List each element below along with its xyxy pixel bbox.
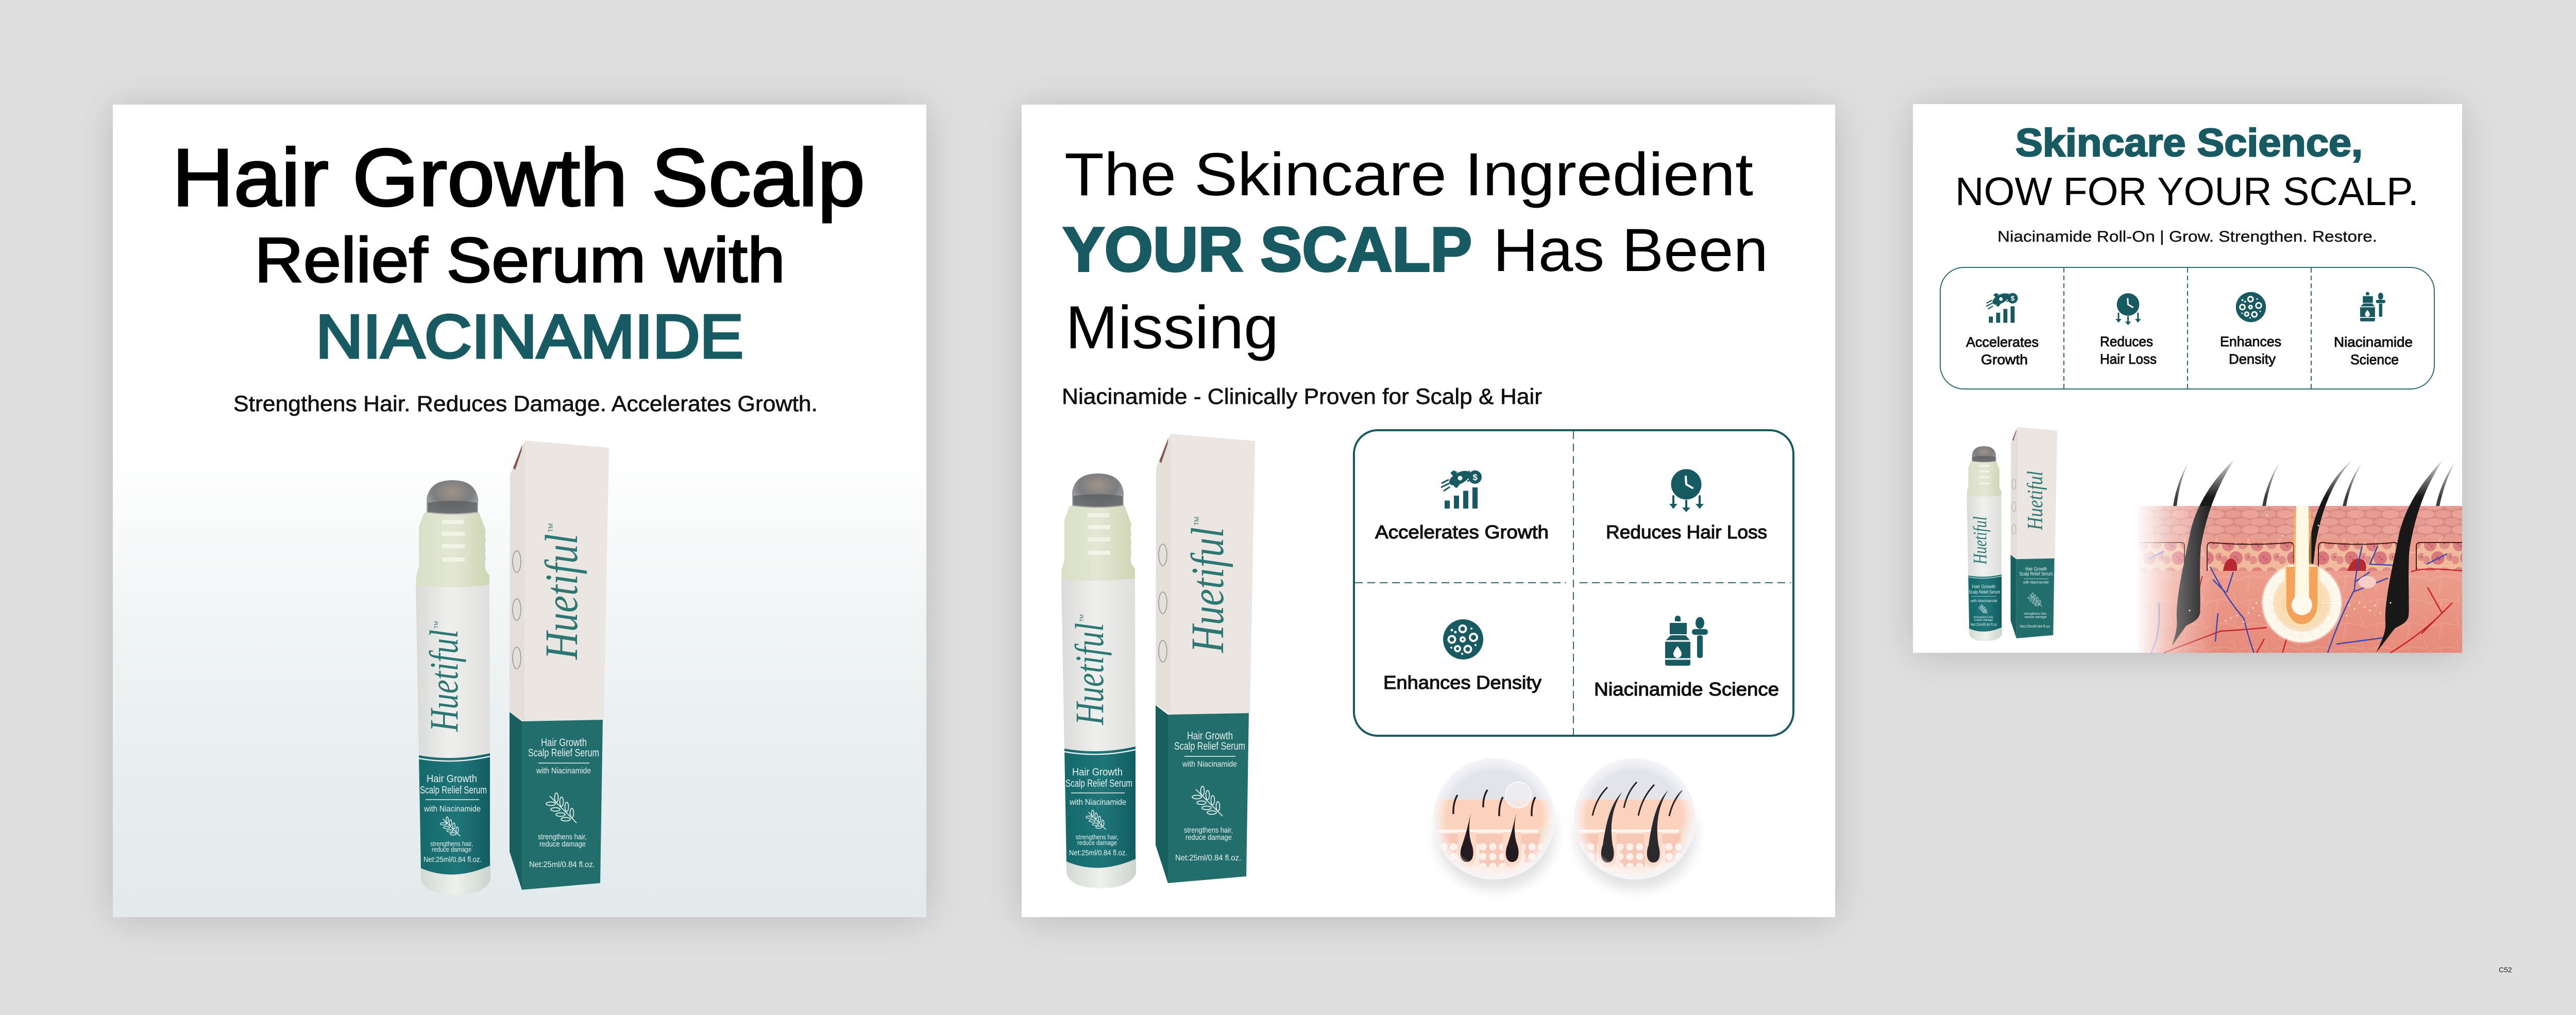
icon: rocket and rising bars <box>1441 468 1482 509</box>
left and top fades <box>2138 453 2462 653</box>
label <box>2100 334 2157 367</box>
product: carton box: TM <box>547 523 554 532</box>
product: carton box: reduce damage <box>539 840 586 849</box>
product: roll-on bottle: with Niacinamide <box>423 805 481 814</box>
product: roll-on bottle: Hair Growth <box>427 773 477 785</box>
product: roll-on bottle: Net:25ml/0.84 fl.oz. <box>1069 849 1127 857</box>
icon: follicle density circle <box>2236 292 2266 322</box>
subtitle: Niacinamide Roll-On | Grow. Strengthen. Restore. <box>1997 228 2377 245</box>
label: Hair Loss <box>2100 351 2157 367</box>
panel: hair growth scalp relief serum <box>113 105 926 917</box>
product: roll-on bottle: with Niacinamide <box>1069 798 1126 807</box>
label: Reduces Hair Loss <box>1606 521 1767 543</box>
product: roll-on bottle: reduce damage <box>1077 839 1117 847</box>
product: roll-on bottle: Scalp Relief Serum <box>420 785 487 796</box>
headline: YOUR SCALP <box>1063 214 1472 284</box>
label: Niacinamide Science <box>1594 679 1779 700</box>
product: roll-on bottle: Hair Growth <box>1972 583 1995 589</box>
product: roll-on bottle: Scalp Relief Serum <box>1969 589 2000 595</box>
product: carton box: Huetiful <box>1182 527 1233 653</box>
headline: NOW FOR YOUR SCALP. <box>1955 170 2419 214</box>
headline: The Skincare Ingredient <box>1064 141 1753 209</box>
headline <box>1955 121 2419 214</box>
product: carton box: Hair Growth <box>1187 730 1233 742</box>
subtitle: Niacinamide - Clinically Proven for Scalp & Hair <box>1062 384 1542 409</box>
label: Accelerates <box>1966 334 2039 350</box>
product: roll-on bottle <box>1967 446 2002 641</box>
title <box>172 132 865 371</box>
product: carton box: Net:25ml/0.84 fl.oz. <box>529 860 595 869</box>
product: carton box: Scalp Relief Serum <box>2019 571 2053 577</box>
label: Enhances <box>2220 334 2281 349</box>
product: roll-on bottle: Huetiful <box>421 630 466 732</box>
product: roll-on bottle <box>416 480 490 895</box>
headline: Missing <box>1065 294 1279 362</box>
hairs <box>2172 460 2455 653</box>
headline: Has Been <box>1493 216 1768 284</box>
product: roll-on bottle: strengthens hair, <box>1974 616 1994 619</box>
label <box>2334 334 2413 367</box>
label <box>1966 334 2039 367</box>
label <box>2220 334 2281 367</box>
title: Hair Growth Scalp <box>172 132 865 223</box>
label: Growth <box>1981 352 2028 367</box>
panel background <box>1913 104 2462 653</box>
title: NIACINAMIDE <box>316 302 743 371</box>
product: carton box: Hair Growth <box>2025 567 2047 572</box>
product: carton box: reduce damage <box>2025 615 2046 619</box>
icon: clock with falling arrows <box>1669 469 1704 512</box>
product: roll-on bottle: Net:25ml/0.84 fl.oz. <box>423 855 482 864</box>
product: carton box: strengthens hair, <box>2024 612 2047 616</box>
benefits card <box>1354 430 1793 736</box>
product: roll-on bottle: Scalp Relief Serum <box>1065 778 1132 789</box>
product: roll-on bottle: Net:25ml/0.84 fl.oz. <box>1971 623 1998 627</box>
panel: the skincare ingredient <box>1022 105 1835 917</box>
icon: clock with falling arrows <box>2115 293 2141 325</box>
label: Enhances Density <box>1383 672 1541 693</box>
product: carton box: with Niacinamide <box>1182 760 1237 769</box>
panel: skincare science <box>1913 104 2462 653</box>
product: roll-on bottle: TM <box>434 621 439 629</box>
title: Relief Serum with <box>255 225 785 296</box>
label: Accelerates Growth <box>1375 521 1549 543</box>
product: carton box: strengthens hair, <box>538 833 587 841</box>
glow ring <box>2261 506 2343 644</box>
icon: rocket and rising bars: $ <box>1472 472 1478 482</box>
product: carton box: Net:25ml/0.84 fl.oz. <box>2020 624 2051 629</box>
product: roll-on bottle <box>1061 473 1136 888</box>
product: roll-on bottle: strengthens hair, <box>430 840 473 848</box>
product: roll-on bottle: with Niacinamide <box>1970 598 1997 603</box>
product: carton box: strengthens hair, <box>1184 826 1233 835</box>
product: carton box: reduce damage <box>1185 834 1232 842</box>
product: carton box: Scalp Relief Serum <box>1174 740 1245 752</box>
product: carton box: Net:25ml/0.84 fl.oz. <box>1175 854 1241 862</box>
product: roll-on bottle: TM <box>1079 615 1085 622</box>
label: Reduces <box>2100 334 2153 349</box>
icon: rocket and rising bars <box>1986 291 2018 323</box>
benefits strip card <box>1940 267 2434 389</box>
headline <box>1063 141 1768 362</box>
slide code: C52 <box>2499 966 2512 974</box>
product: roll-on bottle: Huetiful <box>1970 516 1991 565</box>
icon: serum bottle and dropper <box>2360 292 2385 322</box>
product: carton box <box>510 441 609 890</box>
product: carton box <box>1156 434 1255 883</box>
icon: rocket and rising bars: $ <box>2011 295 2015 302</box>
panel background <box>113 105 926 917</box>
subtitle: Strengthens Hair. Reduces Damage. Accelerates Growth. <box>233 392 818 416</box>
illustration: thinning hair follicle <box>1432 757 1556 890</box>
icon: serum bottle and dropper <box>1665 616 1708 666</box>
product: carton box: with Niacinamide <box>2023 580 2049 585</box>
product: roll-on bottle: reduce damage <box>1974 619 1993 622</box>
illustration: scalp cross-section with glowing follicle <box>2138 453 2462 653</box>
product: carton box: Huetiful <box>536 534 587 660</box>
illustration: restored hair follicle <box>1571 757 1696 890</box>
label: Science <box>2350 352 2399 367</box>
product: carton box: TM <box>1193 517 1200 526</box>
icon: follicle density circle <box>1443 619 1483 659</box>
product: carton box: Scalp Relief Serum <box>528 747 599 759</box>
product: roll-on bottle: Huetiful <box>1067 623 1112 725</box>
product: carton box: with Niacinamide <box>536 767 591 775</box>
product: roll-on bottle: strengthens hair, <box>1076 834 1118 841</box>
panel background <box>1022 105 1835 917</box>
headline: Skincare Science, <box>2015 121 2363 165</box>
sparkles <box>2189 514 2392 622</box>
label: Density <box>2229 351 2276 367</box>
product: roll-on bottle: reduce damage <box>432 846 471 853</box>
product: carton box <box>2011 427 2057 638</box>
product: roll-on bottle: Hair Growth <box>1072 767 1123 778</box>
product: carton box: Hair Growth <box>541 737 587 749</box>
product: carton box: Huetiful <box>2023 471 2047 531</box>
label: Niacinamide <box>2334 334 2413 350</box>
panel shadows <box>113 107 2462 920</box>
